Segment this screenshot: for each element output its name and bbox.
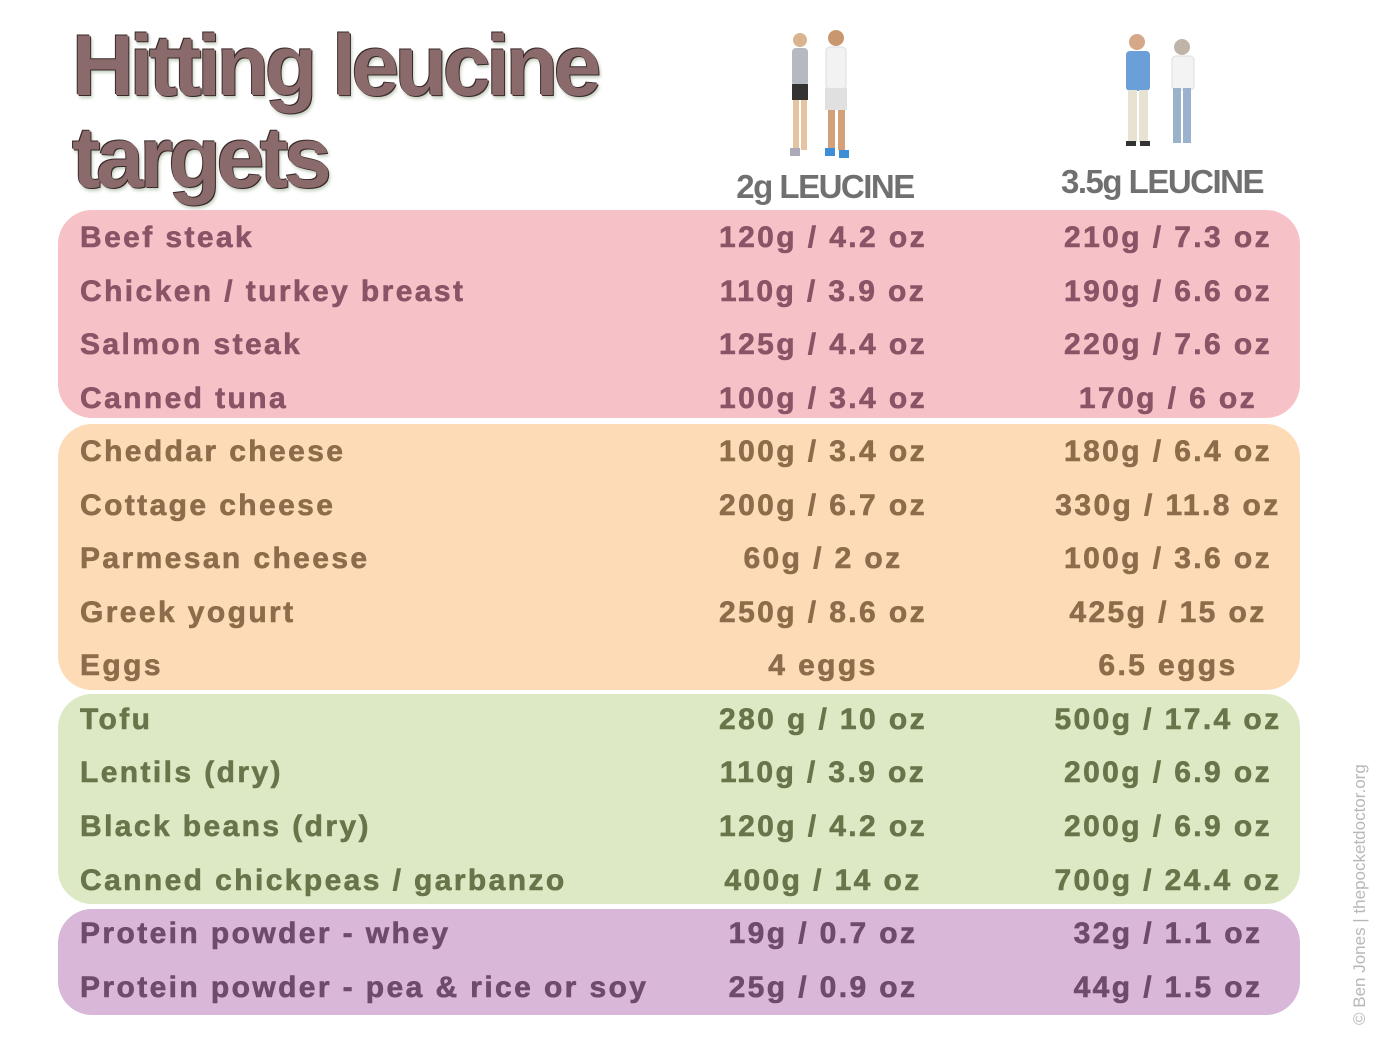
panel: plant proteins: 200g / 6.9 oz [1064,756,1272,789]
icon: young couple [790,30,849,158]
panel: plant proteins: 700g / 24.4 oz [1054,864,1282,897]
panel: protein powders: Protein powder - pea & rice or soy [80,971,648,1004]
panel: dairy and eggs: 6.5 eggs [1098,649,1238,682]
panel: meat and fish: 100g / 3.4 oz [719,382,927,415]
panel: dairy and eggs: 425g / 15 oz [1069,596,1267,629]
panel: plant proteins [58,694,1300,904]
panel: dairy and eggs [58,424,1300,690]
panel: dairy and eggs: 180g / 6.4 oz [1064,435,1272,468]
icon: older couple [1126,34,1194,146]
title: Hitting leucine [72,18,597,114]
panel: meat and fish: 125g / 4.4 oz [719,328,927,361]
panel: protein powders: 44g / 1.5 oz [1074,971,1262,1004]
panel: meat and fish [58,210,1300,418]
panel: meat and fish: Chicken / turkey breast [80,275,465,308]
panel: plant proteins: 110g / 3.9 oz [720,756,926,789]
panel: meat and fish: 110g / 3.9 oz [720,275,926,308]
panel: dairy and eggs: Cheddar cheese [80,435,345,468]
panel: plant proteins: 120g / 4.2 oz [719,810,927,843]
panel: meat and fish: Beef steak [80,221,254,254]
credit: © Ben Jones | thepocketdoctor.org [1350,764,1369,1025]
panel: meat and fish: 190g / 6.6 oz [1064,275,1272,308]
panel: dairy and eggs: Cottage cheese [80,489,335,522]
panel: dairy and eggs: 4 eggs [768,649,878,682]
title: targets [72,110,327,206]
panel: plant proteins: 500g / 17.4 oz [1054,703,1282,736]
panel: protein powders [58,909,1300,1015]
panel: protein powders: 19g / 0.7 oz [729,917,917,950]
panel: protein powders: Protein powder - whey [80,917,450,950]
panel: meat and fish: 210g / 7.3 oz [1064,221,1272,254]
header: 3.5g leucine: 3.5g LEUCINE [1061,163,1263,200]
panel: dairy and eggs: 60g / 2 oz [743,542,903,575]
panel: plant proteins: 200g / 6.9 oz [1064,810,1272,843]
panel: meat and fish: Salmon steak [80,328,302,361]
panel: meat and fish: Canned tuna [80,382,288,415]
panel: dairy and eggs: 100g / 3.6 oz [1064,542,1272,575]
panel: dairy and eggs: Eggs [80,649,163,682]
panel: plant proteins: Lentils (dry) [80,756,283,789]
panel: plant proteins: Canned chickpeas / garbanzo [80,864,567,897]
panel: plant proteins: 400g / 14 oz [724,864,922,897]
panel: meat and fish: 120g / 4.2 oz [719,221,927,254]
panel: protein powders: 25g / 0.9 oz [729,971,917,1004]
panel: dairy and eggs: 250g / 8.6 oz [719,596,927,629]
panel: protein powders: 32g / 1.1 oz [1074,917,1262,950]
panel: dairy and eggs: 200g / 6.7 oz [719,489,927,522]
panel: dairy and eggs: Greek yogurt [80,596,296,629]
panel: dairy and eggs: 100g / 3.4 oz [719,435,927,468]
title [72,18,602,210]
header: 2g leucine: 2g LEUCINE [736,168,914,205]
panel: meat and fish: 170g / 6 oz [1079,382,1257,415]
panel: dairy and eggs: 330g / 11.8 oz [1055,489,1281,522]
panel: plant proteins: Black beans (dry) [80,810,371,843]
panel: meat and fish: 220g / 7.6 oz [1064,328,1272,361]
panel: dairy and eggs: Parmesan cheese [80,542,370,575]
panel: plant proteins: 280 g / 10 oz [719,703,927,736]
panel: plant proteins: Tofu [80,703,152,736]
